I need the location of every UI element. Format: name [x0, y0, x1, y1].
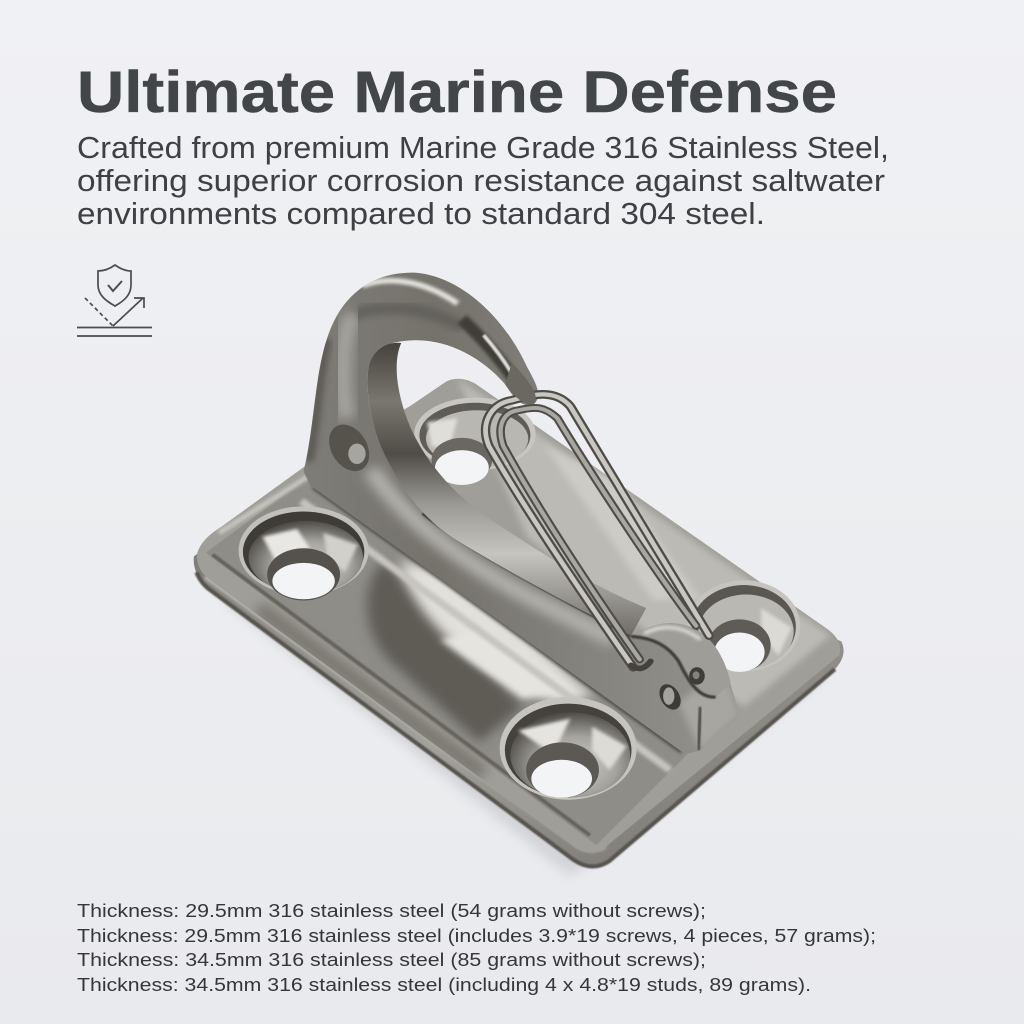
- back plate sheen: [458, 379, 831, 707]
- hook body: [304, 273, 739, 754]
- description text: [77, 130, 889, 231]
- countersunk hole: back: [414, 398, 536, 485]
- countersunk hole: right: [687, 580, 800, 672]
- description text: environments compared to standard 304 steel.: [77, 196, 765, 231]
- ground shadow: [223, 537, 822, 877]
- description text: offering superior corrosion resistance against saltwater: [77, 163, 885, 198]
- specification list: Thickness: 29.5mm 316 stainless steel (54 grams without screws);: [77, 901, 706, 921]
- icon: shield with deflected arrow: [77, 265, 152, 336]
- front plate shading: [206, 475, 687, 845]
- specification list: Thickness: 34.5mm 316 stainless steel (85 grams without screws);: [77, 950, 706, 970]
- specification list: Thickness: 29.5mm 316 stainless steel (includes 3.9*19 screws, 4 pieces, 57 grams);: [77, 926, 876, 946]
- hook tip and nose: [631, 623, 731, 697]
- specification list: Thickness: 34.5mm 316 stainless steel (including 4 x 4.8*19 studs, 89 grams).: [77, 975, 811, 995]
- specification list: [77, 901, 876, 995]
- rivet: left: [321, 419, 377, 477]
- rivet: front: [655, 667, 705, 713]
- hook tip over wire: [505, 363, 536, 404]
- plate top face: [197, 378, 840, 852]
- plate side edge: [194, 533, 844, 866]
- hook inner surface: [368, 343, 646, 636]
- title: Ultimate Marine Defense: [77, 60, 837, 125]
- product photo: stainless steel pad eye with snap hook: [180, 273, 860, 877]
- countersunk hole: front: [500, 697, 637, 800]
- wire snap loop: [486, 394, 709, 668]
- countersunk hole: left: [239, 506, 369, 600]
- description text: Crafted from premium Marine Grade 316 Stainless Steel,: [77, 130, 889, 165]
- ridge shading: [314, 485, 683, 750]
